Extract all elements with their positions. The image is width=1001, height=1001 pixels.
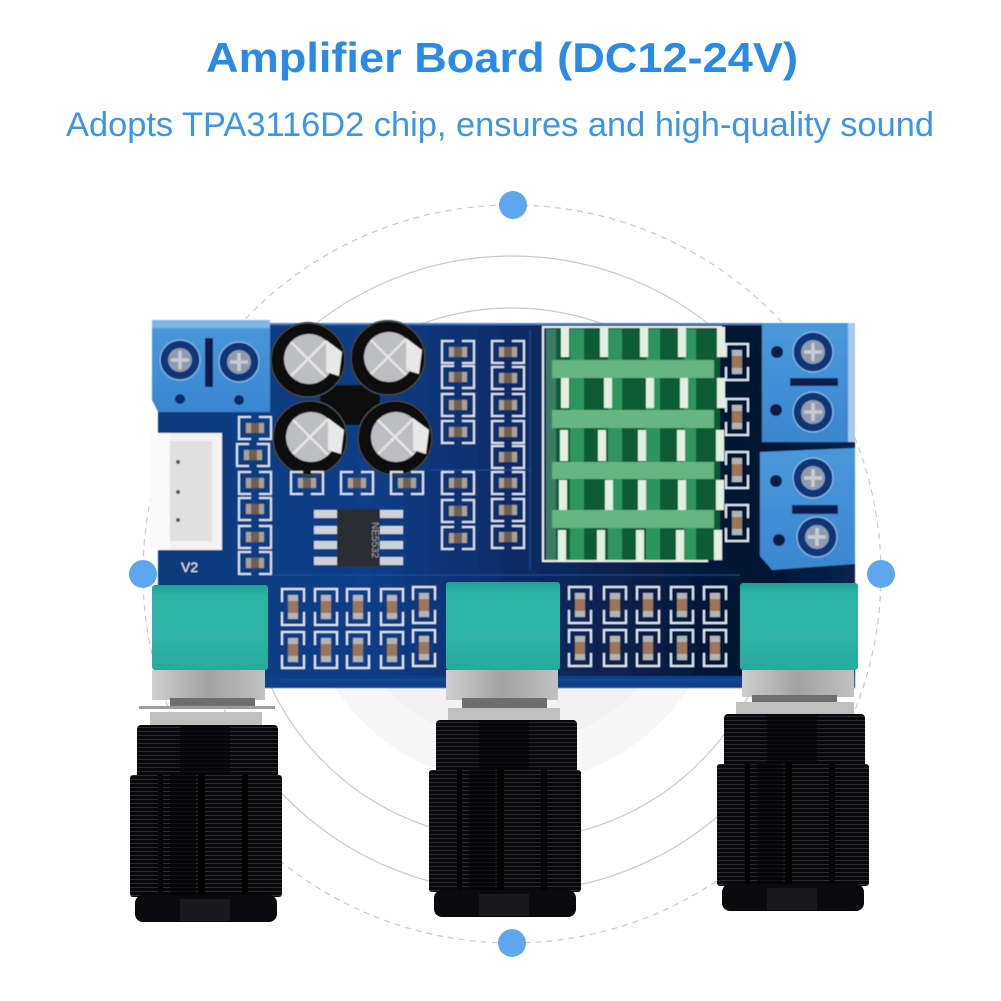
right potentiometer and knob [717,583,869,911]
SMD component rows, left of centre [282,587,435,668]
title: Amplifier Board (DC12-24V) [206,34,798,81]
op-amp chip [314,509,403,567]
blue dots on outer circle [129,191,895,957]
SMD components beside heat sink [726,344,748,541]
op-amp chip: NE5532 [369,522,380,559]
4-pin white connector [150,433,222,550]
right screw terminal, lower [760,448,855,570]
faint central disc [302,364,722,784]
circuit board [150,320,855,688]
silkscreen label V2: V2 [181,559,198,575]
subtitle: Adopts TPA3116D2 chip, ensures and high-quality sound [66,106,934,144]
right screw terminal, upper [762,323,855,442]
SMD components, left area [237,341,524,574]
capacitors [270,320,433,476]
concentric guide circles [143,205,881,943]
left screw terminal [152,320,270,412]
left potentiometer and knob [130,585,282,922]
SMD component rows, right of centre [569,587,726,666]
heat sink [542,327,725,561]
centre potentiometer and knob [429,582,581,917]
